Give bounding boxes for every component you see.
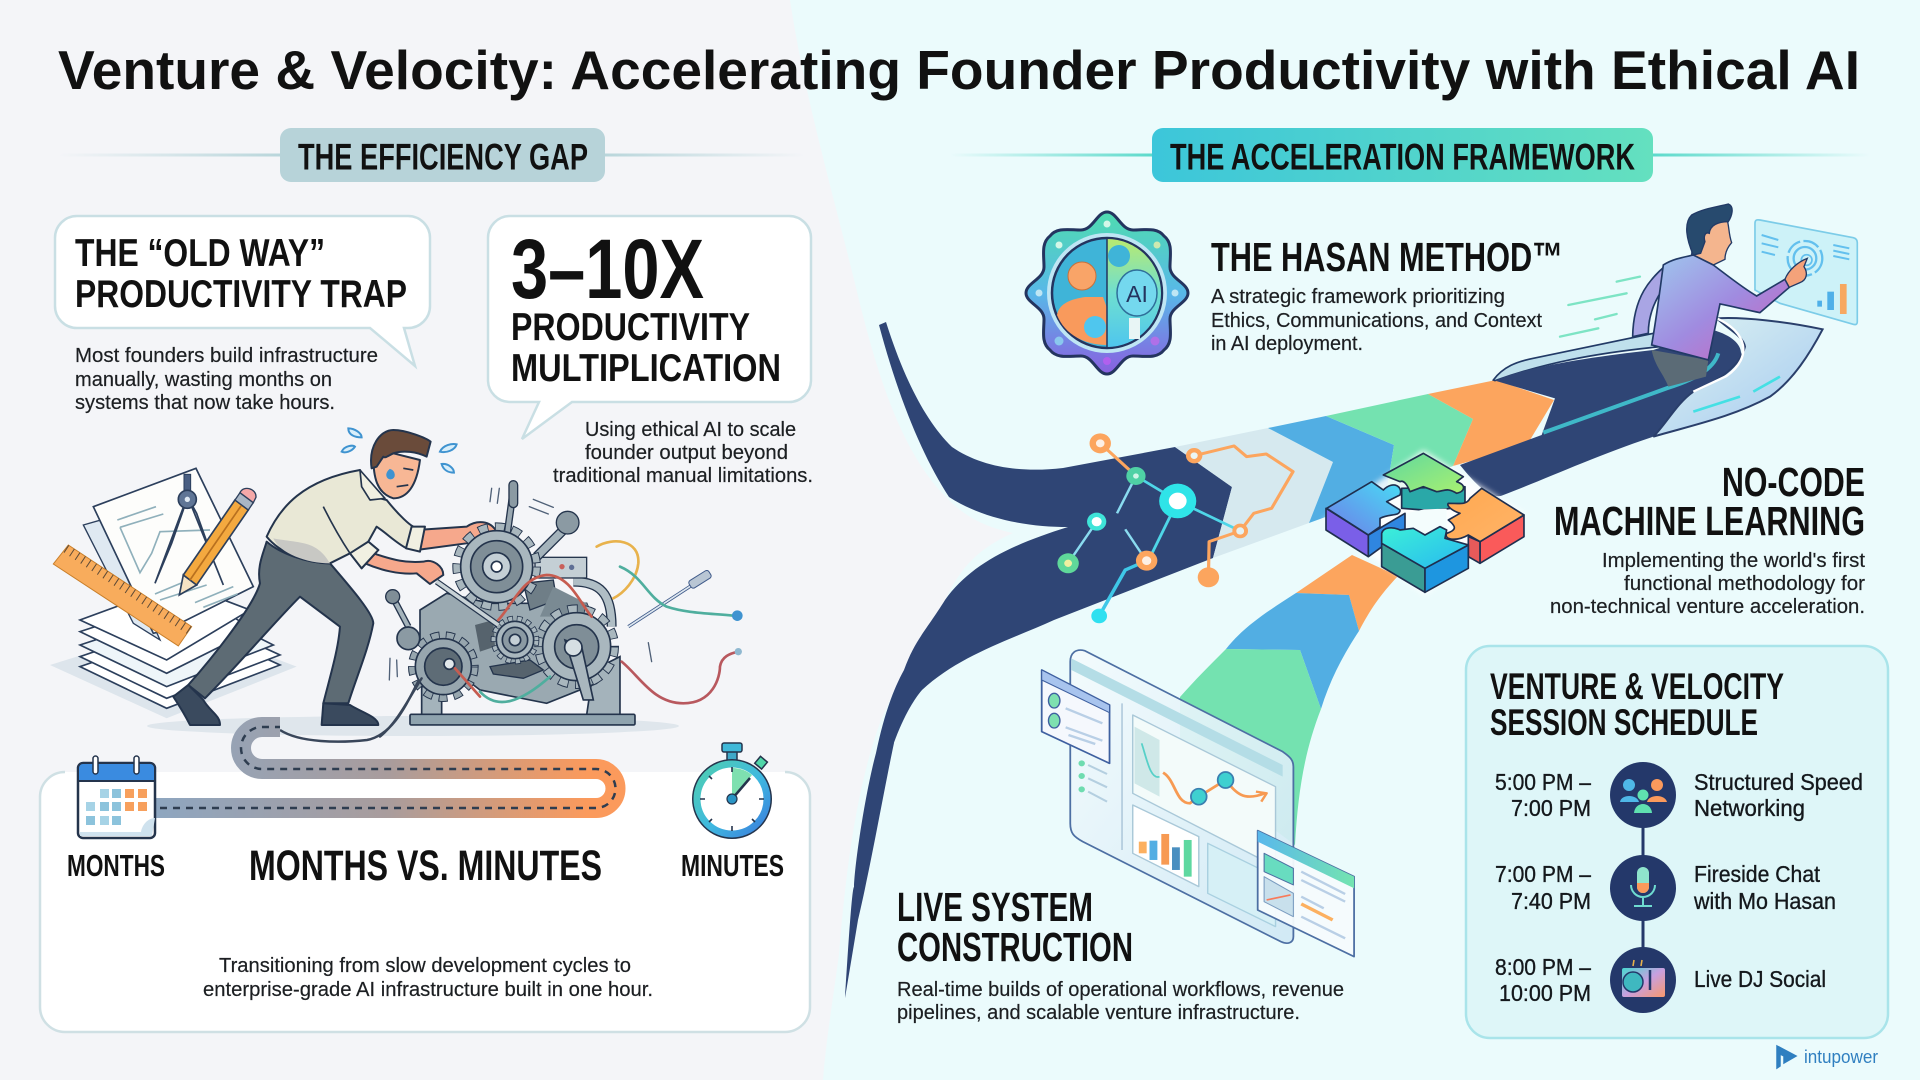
head xyxy=(373,453,420,498)
row: fireside chat: 7:00 PM – xyxy=(1495,861,1591,887)
illustration: founder on speedboat xyxy=(1460,204,1857,496)
illustration: stressed founder xyxy=(173,430,497,725)
panel: old way productivity trap xyxy=(55,216,430,414)
row: networking: 5:00 PM – xyxy=(1495,769,1591,795)
left popup xyxy=(1042,670,1110,763)
bar chart xyxy=(1133,805,1199,887)
compass xyxy=(155,474,223,585)
body text: Using ethical AI to scale xyxy=(585,419,796,441)
logo: intupower xyxy=(1777,1046,1878,1068)
collar xyxy=(360,470,385,500)
text block: hasan method: THE HASAN METHOD™ xyxy=(1211,234,1563,280)
row: fireside chat: with Mo Hasan xyxy=(1693,888,1836,914)
body text xyxy=(75,345,378,414)
body text xyxy=(553,419,813,487)
hull rim xyxy=(1493,333,1660,381)
body text: months vs minutes: enterprise-grade AI infrastructure built in one hour. xyxy=(203,979,653,1001)
title: Venture & Velocity: Accelerating Founder Productivity with Ethical AI xyxy=(58,39,1860,101)
levers xyxy=(386,485,712,627)
text block: no-code machine learning: non-technical venture acceleration. xyxy=(1550,596,1865,618)
panel: months vs minutes xyxy=(40,772,810,1032)
section header: the efficiency gap: THE EFFICIENCY GAP xyxy=(298,136,588,178)
puzzle knobs xyxy=(1108,245,1130,267)
heading: THE “OLD WAY” xyxy=(75,232,325,275)
text block: no-code machine learning: NO-CODE xyxy=(1722,459,1865,505)
chart: lower ribbon colour segments xyxy=(1180,555,1398,845)
hand xyxy=(1785,258,1807,287)
base plate xyxy=(410,714,635,725)
body text: traditional manual limitations. xyxy=(553,465,813,487)
illustration: paper stack with drafting tools xyxy=(50,468,297,718)
shirt xyxy=(267,470,413,568)
orange piece xyxy=(1446,488,1524,563)
panel: session schedule xyxy=(1466,646,1888,1038)
text block: no-code machine learning: functional methodology for xyxy=(1624,573,1865,595)
hair xyxy=(371,430,431,468)
label: minutes: MINUTES xyxy=(681,848,784,883)
icon: neural network nodes xyxy=(1057,433,1293,623)
arrow: cable from machine xyxy=(280,680,419,742)
right popup xyxy=(1258,831,1354,957)
speech bubble xyxy=(55,216,430,366)
text block: live system construction: pipelines, and scalable venture infrastructure. xyxy=(897,1002,1300,1024)
row: live dj social: Live DJ Social xyxy=(1694,966,1826,992)
wires xyxy=(380,488,738,737)
gears xyxy=(397,527,614,700)
left arm xyxy=(1633,263,1668,337)
logo: intupower: intupower xyxy=(1804,1047,1878,1067)
chart: upper ribbon colour segments xyxy=(1175,380,1554,558)
icon: stopwatch xyxy=(692,743,772,839)
text block: hasan method: A strategic framework prioritizing xyxy=(1211,286,1505,308)
ruler xyxy=(53,545,192,646)
arrow: winding path from months to minutes xyxy=(155,727,616,808)
text block: no-code machine learning xyxy=(1550,459,1865,618)
illustration: isometric dashboard xyxy=(1042,650,1354,957)
legs xyxy=(1652,350,1708,387)
heading: SESSION SCHEDULE xyxy=(1490,702,1758,743)
text block: no-code machine learning: Implementing the world's first xyxy=(1602,550,1865,572)
icon: calendar xyxy=(78,756,155,838)
shoes xyxy=(173,685,220,725)
body text: manually, wasting months on xyxy=(75,369,332,391)
label: months: MONTHS xyxy=(67,848,165,883)
section header: the acceleration framework: THE ACCELERATION FRAMEWORK xyxy=(1170,136,1635,178)
hair xyxy=(1687,204,1732,255)
teal piece xyxy=(1382,527,1468,592)
text block: live system construction: LIVE SYSTEM xyxy=(897,884,1093,930)
heading xyxy=(75,232,407,316)
body text: months vs minutes: Transitioning from slow development cycles to xyxy=(219,955,631,977)
row: live dj social xyxy=(1495,947,1826,1013)
stat: 3–10X xyxy=(511,222,704,316)
heading xyxy=(511,306,781,390)
teal stripe xyxy=(1543,353,1718,433)
row: networking xyxy=(1495,762,1863,828)
handle xyxy=(437,582,498,625)
torso and arm xyxy=(1652,255,1789,360)
text block: hasan method: in AI deployment. xyxy=(1211,333,1363,355)
blue piece xyxy=(1326,482,1405,557)
line chart panel xyxy=(1133,715,1276,867)
chart: main ribbon navy xyxy=(845,322,1232,998)
text block: hasan method xyxy=(1211,234,1563,355)
row: fireside chat: 7:40 PM xyxy=(1511,888,1591,914)
text block: live system construction xyxy=(897,884,1344,1024)
row: live dj social: 8:00 PM – xyxy=(1495,954,1591,980)
speed lines xyxy=(1560,277,1640,337)
heading: VENTURE & VELOCITY xyxy=(1490,666,1784,707)
icon: hasan method badge xyxy=(1026,212,1188,374)
row: networking: Structured Speed xyxy=(1694,769,1863,795)
neck and face xyxy=(1692,218,1732,265)
center gap xyxy=(1406,509,1447,536)
body text: systems that now take hours. xyxy=(75,392,335,414)
row: fireside chat xyxy=(1495,855,1836,921)
hull navy xyxy=(1460,330,1741,496)
icon: sweat drops xyxy=(342,428,457,478)
screen xyxy=(1755,220,1857,325)
arms xyxy=(417,522,497,550)
row: networking: 7:00 PM xyxy=(1511,795,1591,821)
body text: founder output beyond xyxy=(585,442,788,464)
text block: live system construction: CONSTRUCTION xyxy=(897,924,1133,970)
section header: the acceleration framework xyxy=(950,128,1870,182)
sidebar xyxy=(1078,760,1107,802)
body text: Most founders build infrastructure xyxy=(75,345,378,367)
cuffs xyxy=(350,527,425,568)
row: live dj social: 10:00 PM xyxy=(1499,980,1591,1006)
robot xyxy=(1117,270,1157,339)
row: fireside chat: Fireside Chat xyxy=(1694,861,1821,887)
hull nose xyxy=(1653,318,1823,437)
text block: hasan method: Ethics, Communications, and Context xyxy=(1211,310,1542,332)
heading xyxy=(1490,666,1784,743)
person xyxy=(1057,297,1107,345)
section header: the efficiency gap xyxy=(58,128,805,182)
green piece xyxy=(1383,453,1465,510)
text block: live system construction: Real-time builds of operational workflows, revenue xyxy=(897,979,1344,1001)
robot: AI xyxy=(1126,281,1148,307)
heading: PRODUCTIVITY TRAP xyxy=(75,273,407,316)
background: right panel xyxy=(790,0,1920,1080)
panel: 3-10x productivity multiplication xyxy=(488,216,813,487)
illustration: ground shadow xyxy=(147,716,679,736)
heading: MULTIPLICATION xyxy=(511,347,781,390)
body text: months vs minutes xyxy=(203,955,653,1001)
heading: months vs minutes: MONTHS VS. MINUTES xyxy=(249,842,602,890)
speech bubble xyxy=(488,216,811,439)
pencil xyxy=(179,488,256,595)
icon: 3d puzzle xyxy=(1323,450,1527,595)
trousers xyxy=(188,542,373,703)
row: networking: Networking xyxy=(1694,795,1805,821)
illustration: tangled machine xyxy=(380,485,743,737)
heading: PRODUCTIVITY xyxy=(511,306,750,349)
